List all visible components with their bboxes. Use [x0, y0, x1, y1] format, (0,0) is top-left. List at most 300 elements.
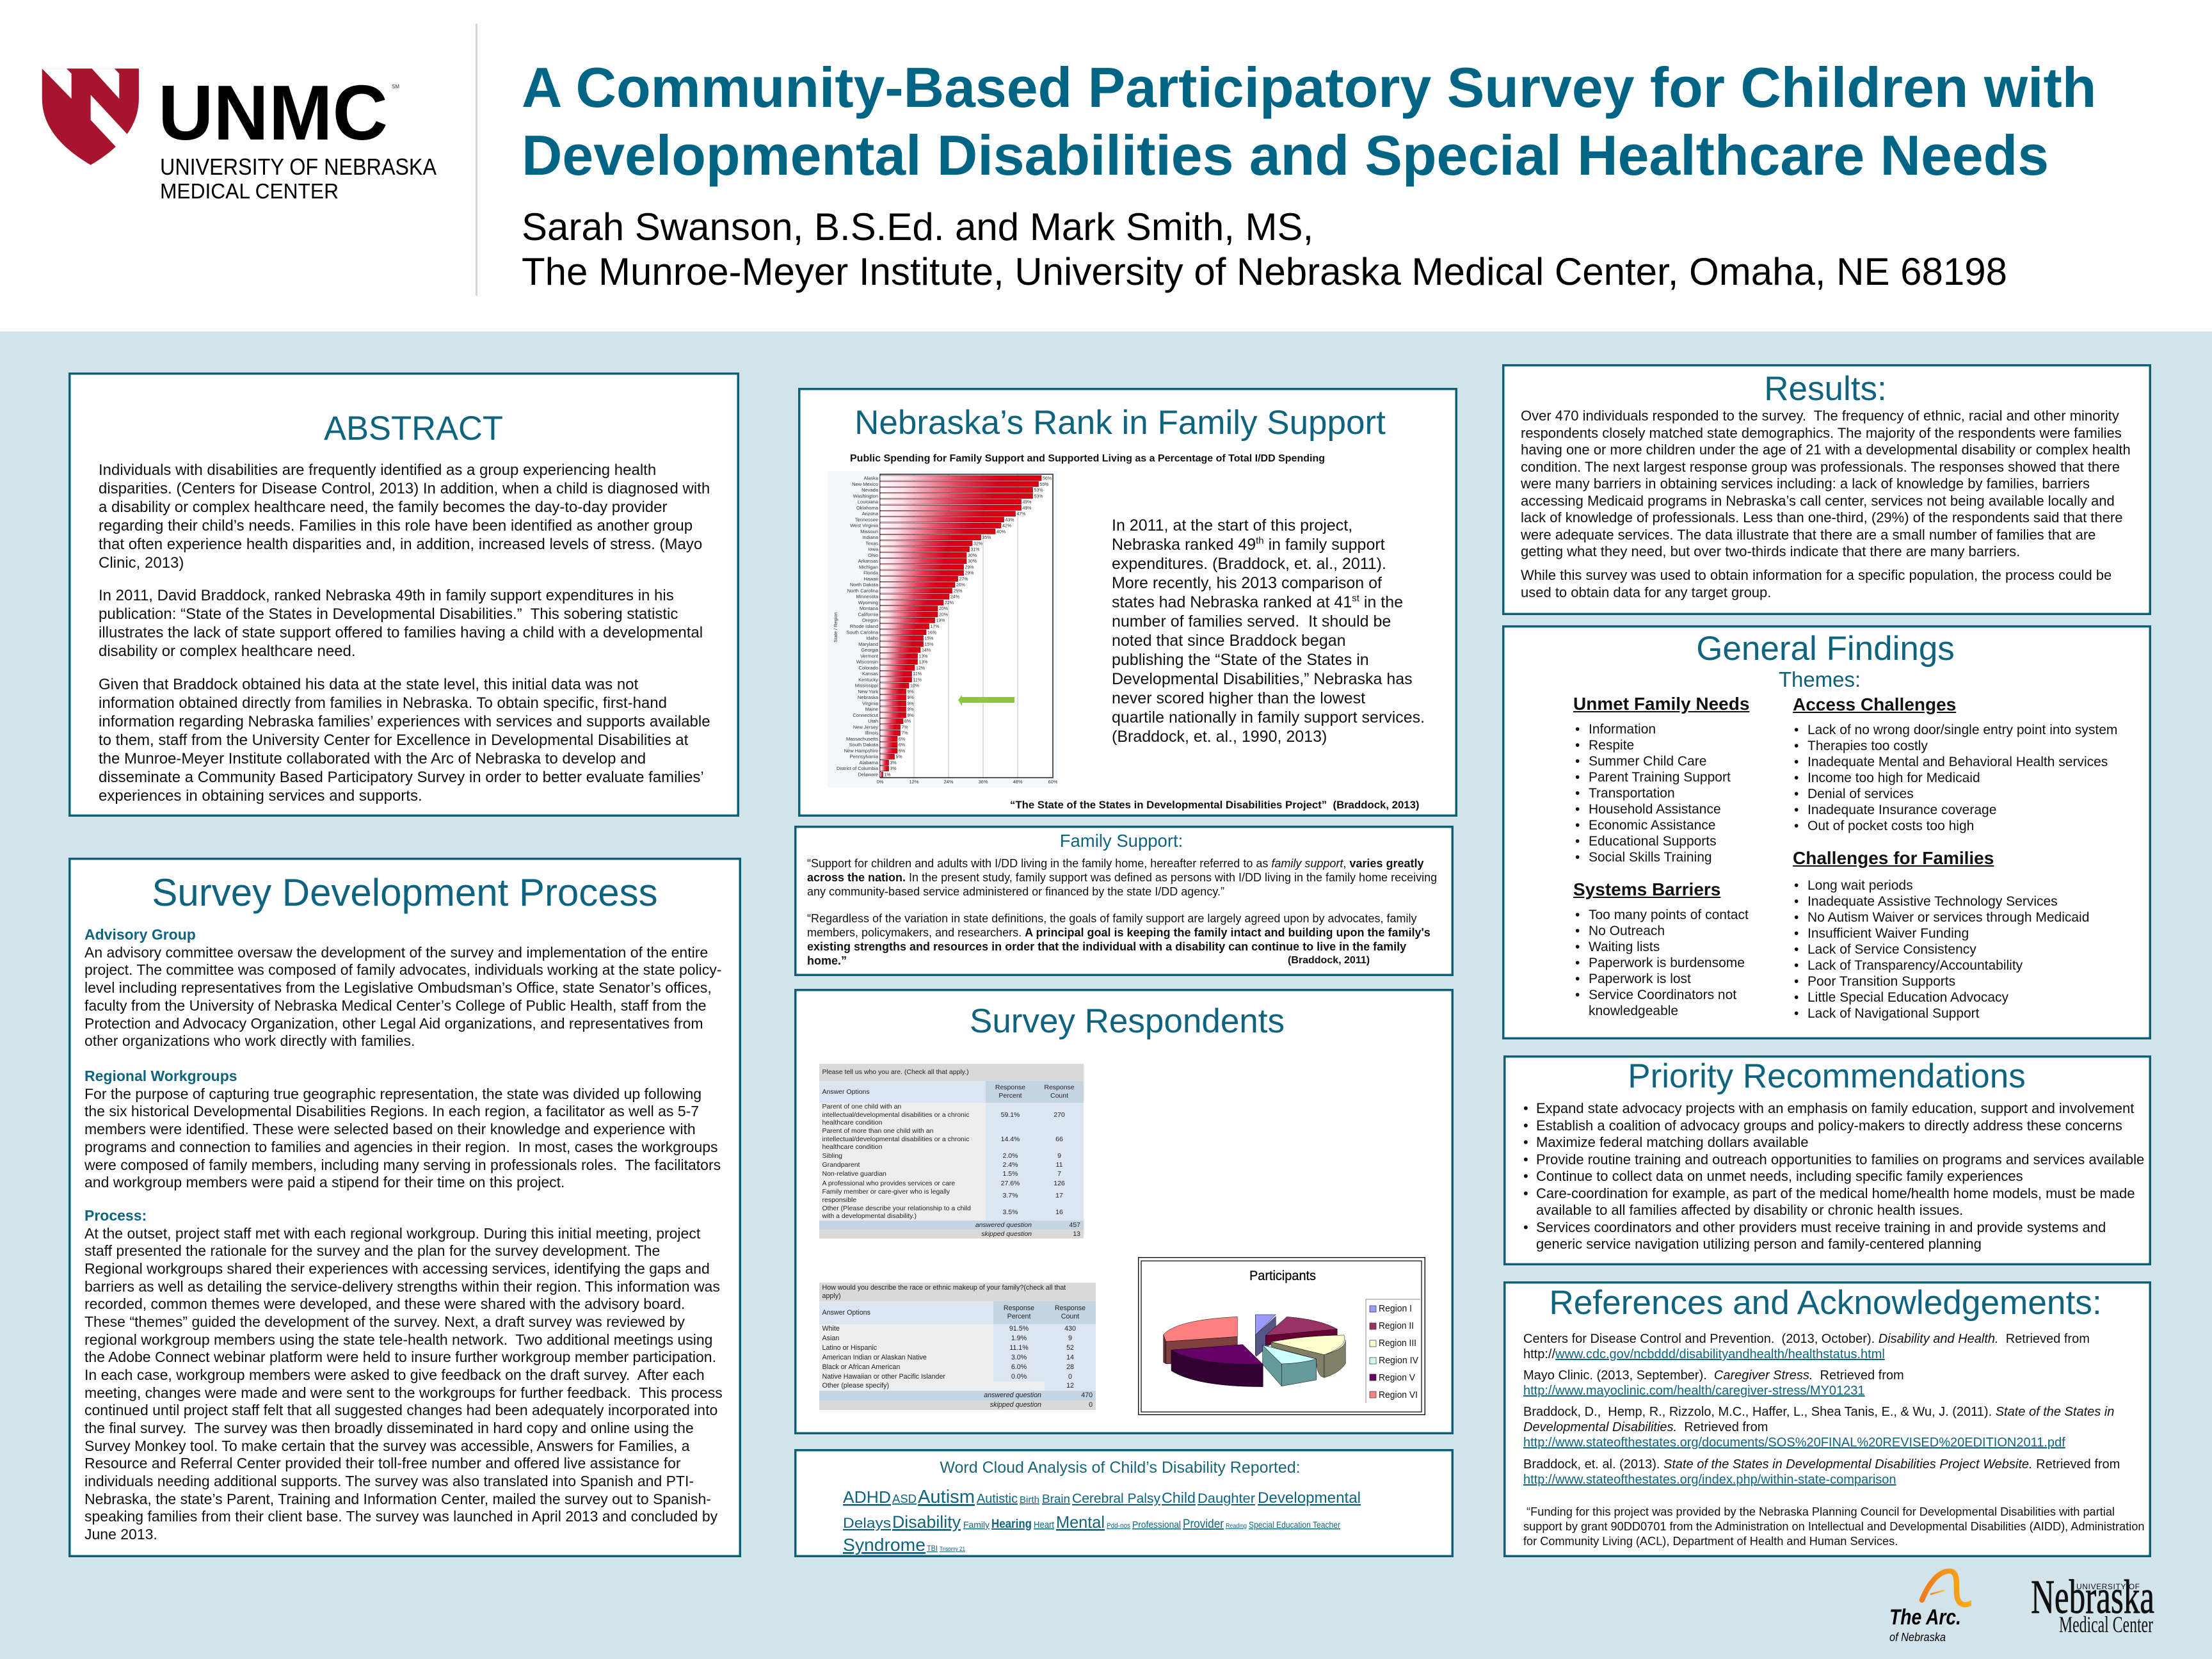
- panel: abstract: In 2011, David Braddock, ranked Nebraska 49th in family support expenditures in his publication: “State of the States in Developmental Disabilities.” This sobering statistic illustrates the lack of state support offered to families having a child with a developmental disability or complex healthcare need.: [99, 586, 703, 659]
- logo: UNMC: UNMC: [158, 69, 388, 156]
- table: race or ethnic makeup: 0.0%: [1011, 1372, 1027, 1380]
- bar chart: spending by state: 13%: [919, 661, 928, 665]
- bar chart: spending by state: [828, 471, 1057, 787]
- bar chart: spending by state: 32%: [974, 541, 982, 546]
- table: who you are: 3.5%: [1003, 1208, 1018, 1216]
- word cloud words: Autism: [918, 1487, 975, 1507]
- bar chart: spending by state: 22%: [945, 601, 954, 605]
- bar chart: spending by state: New Mexico: [852, 481, 878, 487]
- bar chart: spending by state: Hawaii: [863, 576, 878, 582]
- table: who you are: 11: [1056, 1161, 1062, 1169]
- heading: general findings: General Findings: [1696, 630, 1955, 668]
- bar chart: spending by state: 9%: [908, 701, 914, 706]
- word cloud words: Family: [963, 1519, 990, 1530]
- word cloud words: Developmental: [1258, 1489, 1361, 1507]
- word cloud words: Autistic: [977, 1492, 1018, 1506]
- table: who you are: 2.0%: [1003, 1152, 1018, 1160]
- bar chart: spending by state: State / Region: [833, 612, 838, 643]
- bar chart: spending by state: Florida: [863, 570, 879, 576]
- quote one: “Support for children and adults with I/DD living in the family home, hereafter referred to as family support, varies greatly across the nation. In the present study, family support was defined as persons with I/DD living in the family home receiving any community-based service administered or financed by the state I/DD agency.”: [807, 857, 1437, 898]
- bar chart: spending by state: 3%: [890, 767, 897, 771]
- table: race or ethnic makeup: Other (please specify): [822, 1382, 889, 1390]
- word cloud words: Disability: [892, 1512, 961, 1532]
- bar chart: spending by state: 8%: [904, 719, 911, 724]
- heading: nebraska's rank: Nebraska’s Rank in Family Support: [854, 404, 1386, 442]
- bar chart: spending by state: 12%: [909, 779, 919, 785]
- list: recommendations: Continue to collect data on unmet needs, including specific family experiences: [1536, 1168, 2023, 1184]
- reference: Braddock 2013: Braddock, et. al. (2013). State of the States in Developmental Disabilities Project Website. Retrieved from http://www.stateofthestates.org/index.php/within-state-comparison: [1523, 1457, 2120, 1487]
- table: who you are: Response: [995, 1084, 1025, 1091]
- table: who you are: 66: [1055, 1135, 1063, 1143]
- table: race or ethnic makeup: Percent: [1007, 1313, 1030, 1320]
- word cloud words: Reading: [1226, 1523, 1247, 1530]
- bar chart: spending by state: Indiana: [862, 534, 879, 540]
- bar chart: spending by state: Massachusetts: [846, 736, 878, 742]
- list: access challenges: Inadequate Mental and Behavioral Health services: [1807, 755, 2108, 769]
- bar chart: spending by state: 15%: [924, 643, 934, 647]
- table: race or ethnic makeup: 1.9%: [1011, 1334, 1027, 1342]
- bar chart: spending by state: 6%: [899, 749, 905, 754]
- table: who you are: skipped question: [981, 1230, 1032, 1238]
- table: who you are: Family member or care-giver who is legally: [822, 1188, 950, 1196]
- bar chart: spending by state: 17%: [931, 625, 940, 629]
- bar chart: spending by state: 43%: [1005, 518, 1014, 522]
- list: challenges for families: No Autism Waiver or services through Medicaid: [1807, 910, 2089, 925]
- bar chart: spending by state: South Carolina: [846, 629, 879, 635]
- heading: systems barriers: Systems Barriers: [1573, 879, 1720, 899]
- list: access challenges: Out of pocket costs too high: [1807, 819, 1974, 833]
- bar chart: spending by state: Pennsylvania: [849, 754, 879, 760]
- table: who you are: Non-relative guardian: [822, 1170, 886, 1178]
- advisory group text: Advisory Group An advisory committee oversaw the development of the survey and implementation of the entire project. The committee was composed of family advocates, individuals working at the state policy- level including representatives from the Legislative Ombudsman’s Office, state Senator’s offices, faculty from the University of Nebraska Medical Center’s College of Public Health, staff from the Protection and Advocacy Organization, other Legal Aid organizations, and representatives from other organizations who work directly with families.: [84, 926, 721, 1049]
- list: systems barriers: Too many points of contact: [1589, 908, 1749, 922]
- bar chart: spending by state: Arkansas: [858, 558, 878, 564]
- word cloud words: Professional: [1132, 1519, 1181, 1530]
- list: unmet family needs: [1576, 722, 1731, 865]
- word cloud words: Birth: [1020, 1495, 1039, 1505]
- table: race or ethnic makeup: Asian: [822, 1334, 839, 1342]
- abstract text: [99, 461, 710, 804]
- table: who you are: 457: [1069, 1221, 1080, 1229]
- table: who you are: 16: [1055, 1208, 1063, 1216]
- heading: abstract: ABSTRACT: [324, 410, 503, 447]
- list: access challenges: Lack of no wrong door/single entry point into system: [1807, 722, 2117, 737]
- bar chart: spending by state: New York: [858, 689, 878, 694]
- list: challenges for families: [1795, 878, 2089, 1021]
- bar chart: spending by state: Virginia: [862, 700, 879, 706]
- panel: nebraska's rank in family support: [798, 388, 1457, 817]
- table: who you are: with a developmental disability.): [822, 1212, 917, 1220]
- bar chart: spending by state: 25%: [954, 589, 963, 593]
- table: who you are: 126: [1054, 1180, 1065, 1187]
- bar chart: spending by state: 10%: [910, 684, 919, 689]
- list: unmet family needs: Respite: [1589, 738, 1634, 753]
- bar chart: spending by state: 24%: [943, 779, 954, 785]
- bar chart: spending by state: Maryland: [858, 641, 878, 647]
- list: systems barriers: Waiting lists: [1589, 940, 1660, 954]
- list: recommendations: Provide routine training and outreach opportunities to families on programs and services available: [1536, 1151, 2144, 1167]
- list: systems barriers: [1576, 908, 1749, 1018]
- reference: Braddock 2011: Braddock, D., Hemp, R., Rizzolo, M.C., Haffer, L., Shea Tanis, E., & Wu, J. (2011). State of the States in Developmental Disabilities. Retrieved from http://www.stateofthestates.org/documents/SOS%20FINAL%20REVISED%20EDITION2011.pdf: [1523, 1405, 2114, 1450]
- bar chart: spending by state: Wisconsin: [856, 659, 878, 665]
- heading: survey development process: Survey Development Process: [152, 871, 658, 914]
- table: race or ethnic makeup: 12: [1066, 1382, 1074, 1390]
- bar chart: spending by state: 53%: [1034, 494, 1043, 499]
- panel: abstract: [68, 373, 739, 817]
- bar chart: spending by state: Ohio: [868, 552, 878, 558]
- table: who you are: 27.6%: [1001, 1180, 1020, 1187]
- word cloud words: Hearing: [991, 1518, 1032, 1531]
- bar chart: spending by state: 6%: [899, 743, 905, 748]
- bar chart: spending by state: Idaho: [866, 635, 878, 641]
- list: systems barriers: Paperwork is burdensome: [1589, 956, 1745, 970]
- heading: family support: Family Support:: [1060, 831, 1183, 851]
- bar chart: spending by state: 16%: [927, 630, 936, 635]
- abstract text: Individuals with disabilities are frequently identified as a group experiencing health disparities. (Centers for Disease Control, 2013) In addition, when a child is diagnosed with a disability or complex healthcare need, the family becomes the day-to-day provider regarding their child’s needs. Families in this role have been identified as another group that often experience health disparities and, in addition, increased levels of stress. (Mayo Clinic, 2013): [99, 461, 710, 571]
- heading: priority recommendations: Priority Recommendations: [1628, 1057, 2026, 1095]
- bar chart: spending by state: Georgia: [861, 647, 879, 653]
- results paragraph: Over 470 individuals responded to the survey. The frequency of ethnic, racial and other minority respondents closely matched state demographics. The majority of the respondents were families having one or more children under the age of 21 with a developmental disability or complex health condition. The next largest response group was professionals. The responses showed that there were many barriers in obtaining services including: a lack of knowledge by families, barriers accessing Medicaid programs in Nebraska’s call center, services not being available locally and lack of knowledge of professionals. Less than one-third, (29%) of the respondents said that there were adequate services. The data illustrate that there are a small number of families that are getting what they need, but over two-thirds indicate that there are many barriers.: [1521, 408, 2131, 559]
- bar chart: spending by state: 11%: [913, 678, 922, 682]
- panel: word cloud: [794, 1449, 1454, 1557]
- bar chart: spending by state: 1%: [885, 773, 891, 777]
- list: systems barriers: Paperwork is lost: [1589, 972, 1691, 986]
- panel: priority recommendations: [1503, 1055, 2151, 1265]
- word cloud words: Syndrome: [843, 1535, 926, 1555]
- word cloud words: Provider: [1183, 1518, 1224, 1531]
- heading: references: References and Acknowledgements:: [1549, 1284, 2102, 1322]
- bar chart: spending by state: Michigan: [859, 564, 878, 570]
- list: challenges for families: Inadequate Assistive Technology Services: [1807, 894, 2058, 909]
- list: recommendations: Maximize federal matching dollars available: [1536, 1134, 1809, 1150]
- table: race or ethnic makeup: Count: [1061, 1313, 1079, 1320]
- table: who you are: 7: [1057, 1170, 1061, 1178]
- pie chart: participants by region: Region VI: [1379, 1390, 1418, 1400]
- table: race or ethnic makeup: 91.5%: [1009, 1325, 1029, 1333]
- pie chart: participants by region: Participants: [1249, 1269, 1316, 1283]
- bar chart: spending by state: 36%: [978, 779, 988, 785]
- table: race or ethnic makeup: apply): [822, 1292, 841, 1299]
- header band: [0, 0, 2212, 332]
- bar chart: spending by state: 49%: [1023, 506, 1032, 511]
- bar chart: spending by state: 5%: [896, 755, 902, 760]
- table: who you are: 3.7%: [1003, 1192, 1018, 1199]
- list: unmet family needs: Social Skills Training: [1589, 850, 1712, 865]
- table: who you are: Please tell us who you are. (Check all that apply.): [822, 1068, 969, 1076]
- bar chart: spending by state: 48%: [1013, 779, 1023, 785]
- bar chart: spending by state: 9%: [908, 708, 914, 712]
- table: race or ethnic makeup: How would you describe the race or ethnic makeup of your family?(check all that: [822, 1284, 1066, 1292]
- list: access challenges: Denial of services: [1807, 787, 1914, 801]
- bar chart: spending by state: 49%: [1023, 501, 1032, 504]
- table: race or ethnic makeup: 6.0%: [1011, 1363, 1027, 1371]
- quote citation: (Braddock, 2011): [1288, 955, 1370, 966]
- panel: general findings: [1502, 625, 2151, 1039]
- logo: University of Nebraska Medical Center: UNIVERSITY OF: [2076, 1582, 2140, 1591]
- list: challenges for families: Lack of Service Consistency: [1807, 942, 1976, 957]
- list: recommendations: [1523, 1100, 2144, 1252]
- panel: abstract: Given that Braddock obtained his data at the state level, this initial data was not information obtained directly from families in Nebraska. To obtain specific, first-hand information regarding Nebraska families’ experiences with services and supports available to them, staff from the University Center for Excellence in Developmental Disabilities at the Munroe-Meyer Institute collaborated with the Arc of Nebraska to develop and disseminate a Community Based Participatory Survey in order to better evaluate families’ experiences in obtaining services and supports.: [99, 676, 710, 804]
- bar chart: spending by state: 9%: [908, 714, 914, 718]
- word cloud words: Child: [1162, 1489, 1196, 1506]
- table: who you are: Other (Please describe your relationship to a child: [822, 1205, 971, 1212]
- table: race or ethnic makeup: 3.0%: [1011, 1354, 1027, 1361]
- pie chart: participants by region: Region V: [1379, 1372, 1415, 1383]
- bar chart: spending by state: Wyoming: [858, 600, 878, 605]
- bar chart: spending by state: 30%: [968, 559, 977, 564]
- bar chart: spending by state: Missouri: [860, 529, 878, 534]
- chart title: Public Spending for Family Support and Supported Living as a Percentage of Total I/DD Spending: [850, 453, 1325, 464]
- bar chart: spending by state: Tennessee: [855, 517, 878, 522]
- list: challenges for families: Lack of Transparency/Accountability: [1807, 958, 2023, 973]
- word cloud words: Brain: [1042, 1493, 1070, 1505]
- word cloud words: ADHD: [843, 1487, 891, 1507]
- heading: access challenges: Access Challenges: [1793, 694, 1956, 714]
- word cloud words: Mental: [1056, 1512, 1105, 1532]
- table: who you are: 9: [1057, 1152, 1061, 1160]
- word cloud words: Cerebral Palsy: [1072, 1491, 1160, 1506]
- bar chart: spending by state: 7%: [901, 732, 908, 736]
- list: recommendations: Expand state advocacy projects with an emphasis on family education, support and involvement: [1536, 1100, 2134, 1116]
- list: unmet family needs: Educational Supports: [1589, 834, 1717, 849]
- bar chart: spending by state: Colorado: [859, 665, 878, 671]
- list: unmet family needs: Summer Child Care: [1589, 754, 1706, 769]
- bar chart: spending by state: California: [858, 612, 879, 617]
- bar chart: spending by state: 29%: [965, 565, 974, 570]
- panel: family support: [794, 826, 1454, 976]
- pie chart: participants by region: Region IV: [1379, 1355, 1418, 1366]
- logo: UNMC: [42, 68, 437, 203]
- table: who you are: [819, 1064, 1084, 1238]
- bar chart: spending by state: 30%: [968, 554, 977, 558]
- table: who you are: Percent: [998, 1092, 1022, 1100]
- heading: results: Results:: [1764, 370, 1887, 408]
- bar chart: spending by state: 27%: [959, 577, 968, 582]
- pie chart: participants by region: [1138, 1257, 1425, 1415]
- funding acknowledgement: “Funding for this project was provided by the Nebraska Planning Council for Developmental Disabilities with partial support by grant 90DD0701 from the Administration on Intellectual and Developmental Disabilities (AIDD), Administration for Community Living (ACL), Department of Health and Human Services.: [1523, 1505, 2144, 1548]
- table: race or ethnic makeup: Answer Options: [822, 1308, 870, 1316]
- table: race or ethnic makeup: [819, 1283, 1096, 1410]
- list: access challenges: Therapies too costly: [1807, 739, 1928, 753]
- reference: Mayo Clinic: Mayo Clinic. (2013, September). Caregiver Stress. Retrieved from http://www.mayoclinic.com/health/caregiver-stress/MY01231: [1523, 1368, 1904, 1398]
- word cloud words: TBI: [927, 1544, 938, 1553]
- bar chart: spending by state: Washington: [853, 493, 878, 499]
- bar chart: spending by state: Louisiana: [858, 499, 879, 504]
- table: who you are: 14.4%: [1001, 1135, 1020, 1143]
- list: challenges for families: Long wait periods: [1807, 878, 1913, 892]
- bar chart: spending by state: 35%: [982, 536, 991, 540]
- list: unmet family needs: Parent Training Support: [1589, 770, 1731, 785]
- table: race or ethnic makeup: Native Hawaiian or other Pacific Islander: [822, 1372, 945, 1380]
- table: race or ethnic makeup: 14: [1066, 1354, 1074, 1361]
- bar chart: spending by state: 53%: [1034, 488, 1043, 493]
- bar chart: spending by state: Kansas: [862, 671, 878, 677]
- table: race or ethnic makeup: 9: [1068, 1334, 1072, 1342]
- table: race or ethnic makeup: 0: [1068, 1372, 1072, 1380]
- word cloud words: Pdd-nos: [1107, 1522, 1130, 1530]
- bar chart: spending by state: 13%: [919, 654, 928, 659]
- regional workgroups text: Regional Workgroups For the purpose of capturing true geographic representation, the state was divided up following the six historical Developmental Disabilities Regions. In each region, a facilitator as well as 5-7 members were identified. These were selected based on their knowledge and experience with programs and connection to families and agencies in their region. In most, cases the workgroups were composed of family members, including many serving in professionals roles. The facilitators and workgroup members were paid a stipend for their time on this project.: [84, 1068, 721, 1190]
- table: race or ethnic makeup: 470: [1081, 1391, 1093, 1399]
- bar chart: spending by state: Alabama: [859, 760, 879, 765]
- bar chart: spending by state: Rhode Island: [850, 623, 878, 629]
- bar chart: spending by state: 31%: [970, 548, 980, 552]
- chart citation: “The State of the States in Developmental Disabilities Project” (Braddock, 2013): [1010, 799, 1419, 811]
- quote two: “Regardless of the variation in state definitions, the goals of family support are largely agreed upon by advocates, family members, policymakers, and researchers. A principal goal is keeping the family intact and building upon the family's existing strengths and resources in order that the individual with a disability can continue to live in the family home.”: [807, 912, 1431, 967]
- table: who you are: Parent of more than one child with an: [822, 1127, 933, 1135]
- table: race or ethnic makeup: Black or African American: [822, 1363, 900, 1371]
- bar chart: spending by state: Texas: [865, 540, 878, 546]
- bar chart: spending by state: Illinois: [865, 730, 878, 736]
- authors: Sarah Swanson, B.S.Ed. and Mark Smith, MS, The Munroe-Meyer Institute, University of Nebraska Medical Center, Omaha, NE 68198: [522, 205, 2007, 293]
- table: who you are: Response: [1044, 1084, 1075, 1091]
- table: who you are: 59.1%: [1001, 1111, 1020, 1119]
- logo: UNMC: SM: [392, 84, 399, 90]
- table: race or ethnic makeup: 0: [1089, 1401, 1093, 1409]
- table: who you are: Count: [1050, 1092, 1068, 1100]
- table: who you are: Grandparent: [822, 1161, 860, 1169]
- heading: survey respondents: Survey Respondents: [970, 1002, 1285, 1040]
- bar chart: spending by state: 15%: [924, 636, 934, 641]
- bar chart: spending by state: Arizona: [862, 511, 879, 517]
- table: race or ethnic makeup: White: [822, 1325, 840, 1333]
- bar chart: spending by state: New Jersey: [853, 724, 878, 730]
- list: challenges for families: Lack of Navigational Support: [1807, 1006, 1979, 1021]
- table: race or ethnic makeup: Response: [1004, 1304, 1034, 1312]
- bar chart: spending by state: 3%: [890, 761, 897, 765]
- bar chart: spending by state: 0%: [877, 779, 884, 785]
- word cloud words: Heart: [1034, 1519, 1055, 1530]
- word cloud words: Delays: [843, 1515, 891, 1531]
- bar chart: spending by state: New Hampshire: [844, 748, 878, 754]
- bar chart: spending by state: 42%: [1002, 524, 1011, 529]
- bar chart: spending by state: Nebraska: [858, 694, 879, 700]
- list: access challenges: Inadequate Insurance coverage: [1807, 803, 1996, 817]
- results closing paragraph: While this survey was used to obtain information for a specific population, the process could be used to obtain data for any target group.: [1521, 567, 2112, 600]
- heading: challenges for families: Challenges for Families: [1793, 847, 1994, 868]
- bar chart: spending by state: Delaware: [858, 772, 878, 777]
- bar chart: spending by state: Nevada: [862, 487, 879, 493]
- bar chart: spending by state: 14%: [922, 648, 931, 653]
- list: unmet family needs: Household Assistance: [1589, 802, 1721, 817]
- panel: results: [1502, 364, 2151, 615]
- table: race or ethnic makeup: Latino or Hispanic: [822, 1344, 877, 1352]
- bar chart: spending by state: 40%: [997, 530, 1006, 534]
- word cloud words: [843, 1487, 1361, 1555]
- table: who you are: intellectual/developmental disabilities or a chronic: [822, 1135, 969, 1143]
- bar chart: spending by state: Utah: [868, 718, 878, 724]
- table: who you are: 13: [1073, 1230, 1080, 1238]
- bar chart: spending by state: 55%: [1039, 483, 1049, 487]
- list: recommendations: Establish a coalition of advocacy groups and policy-makers to directly address these concerns: [1536, 1118, 2122, 1133]
- bar chart: spending by state: 6%: [899, 737, 905, 742]
- list: access challenges: Income too high for Medicaid: [1807, 771, 1980, 785]
- table: who you are: healthcare condition: [822, 1143, 882, 1151]
- bar chart: spending by state: Maine: [865, 707, 878, 712]
- word cloud words: Special Education Teacher: [1249, 1519, 1340, 1530]
- bar chart: spending by state: District of Columbia: [837, 765, 879, 771]
- rank narrative text: In 2011, at the start of this project, Nebraska ranked 49th in family support expenditures. (Braddock, et. al., 2011). More recently, his 2013 comparison of states had Nebraska ranked at 41st in the number of families served. It should be noted that since Braddock began publishing the “State of the States in Developmental Disabilities,” Nebraska has never scored higher than the lowest quartile nationally in family support services. (Braddock, et. al., 1990, 2013): [1112, 517, 1425, 746]
- list: challenges for families: Poor Transition Supports: [1807, 974, 1955, 989]
- reference: CDC: Centers for Disease Control and Prevention. (2013, October). Disability and Health. Retrieved from http://www.cdc.gov/ncbddd/disabilityandhealth/healthstatus.html: [1523, 1332, 2090, 1361]
- pie chart: participants by region: Region III: [1379, 1338, 1416, 1349]
- table: race or ethnic makeup: 430: [1064, 1325, 1076, 1333]
- pie chart: participants by region: Region II: [1379, 1320, 1414, 1331]
- table: who you are: answered question: [975, 1221, 1032, 1229]
- list: systems barriers: No Outreach: [1589, 924, 1665, 938]
- bar chart: spending by state: 19%: [936, 619, 945, 623]
- table: who you are: 270: [1054, 1111, 1065, 1119]
- list: recommendations: Care-coordination for example, as part of the medical home/health home models, must be made available to all families affected by disability or chronic health issues.: [1536, 1185, 2135, 1218]
- list: access challenges: [1795, 722, 2117, 833]
- list: challenges for families: Insufficient Waiver Funding: [1807, 926, 1969, 941]
- logo: The Arc of Nebraska: [1889, 1568, 1971, 1644]
- logo: UNMC: MEDICAL CENTER: [160, 179, 339, 203]
- word cloud words: ASD: [892, 1493, 917, 1505]
- list: unmet family needs: Information: [1589, 722, 1656, 736]
- heading: word cloud: Word Cloud Analysis of Child’s Disability Reported:: [940, 1459, 1301, 1477]
- bar chart: spending by state: 47%: [1016, 512, 1026, 517]
- bar chart: spending by state: West Virginia: [850, 523, 879, 529]
- panel: references and acknowledgements: [1503, 1281, 2151, 1557]
- bar chart: spending by state: North Carolina: [847, 588, 879, 593]
- table: who you are: A professional who provides services or care: [822, 1180, 955, 1187]
- subheading: themes: Themes:: [1779, 668, 1861, 691]
- bar chart: spending by state: 9%: [908, 696, 914, 700]
- bar chart: spending by state: 7%: [901, 725, 908, 730]
- bar chart: spending by state: Oklahoma: [856, 505, 879, 511]
- list: challenges for families: Little Special Education Advocacy: [1807, 990, 2008, 1005]
- bar chart: spending by state: North Dakota: [850, 582, 879, 588]
- table: race or ethnic makeup: American Indian or Alaskan Native: [822, 1354, 927, 1361]
- word cloud words: Daughter: [1198, 1491, 1255, 1506]
- bar chart: spending by state: 29%: [965, 572, 974, 576]
- bar chart: spending by state: Oregon: [862, 618, 878, 623]
- table: race or ethnic makeup: 52: [1066, 1344, 1074, 1352]
- table: who you are: intellectual/developmental disabilities or a chronic: [822, 1111, 969, 1119]
- table: race or ethnic makeup: 11.1%: [1009, 1344, 1029, 1352]
- bar chart: spending by state: Connecticut: [853, 712, 879, 718]
- bar chart: spending by state: Kentucky: [858, 677, 878, 682]
- list: unmet family needs: Transportation: [1589, 786, 1675, 801]
- table: who you are: Answer Options: [822, 1088, 870, 1096]
- table: who you are: 1.5%: [1003, 1170, 1018, 1178]
- bar chart: spending by state: Vermont: [860, 653, 879, 659]
- table: who you are: Parent of one child with an: [822, 1103, 901, 1110]
- bar chart: spending by state: Iowa: [868, 547, 879, 552]
- table: race or ethnic makeup: 28: [1066, 1363, 1074, 1371]
- word cloud words: Trisomy 21: [940, 1546, 965, 1552]
- table: who you are: Sibling: [822, 1152, 842, 1160]
- table: who you are: responsible: [822, 1196, 856, 1204]
- bar chart: spending by state: 11%: [913, 672, 922, 677]
- pie chart: participants by region: Region I: [1379, 1303, 1412, 1314]
- title: A Community-Based Participatory Survey for Children with Developmental Disabilities and Special Healthcare Needs: [522, 56, 2096, 187]
- process text: Process: At the outset, project staff met with each regional workgroup. During this initial meeting, project staff presented the rationale for the survey and the plan for the survey development. The Regional workgroups shared their experiences with accessing services, identifying the gaps and barriers as well as detailing the service-delivery strengths within their region. This information was recorded, common themes were developed, and these were shared with the advisory board. These “themes” guided the development of the survey. Next, a draft survey was reviewed by regional workgroup members using the state tele-health network. Two additional meetings using the Adobe Connect webinar platform were held to insure further workgroup member participation. In each case, workgroup members were asked to give feedback on the draft survey. After each meeting, changes were made and were sent to the workgroups for further feedback. This process continued until project staff felt that all suggested changes had been adequately incorporated into the final survey. The survey was then broadly disseminated in hard copy and online using the Survey Monkey tool. To make certain that the survey was accessible, Answers for Families, a Resource and Referral Center provided their toll-free number and offered live assistance for individuals needing additional supports. The survey was also translated into Spanish and PTI- Nebraska, the state’s Parent, Training and Information Center, mailed the survey out to Spanish- speaking families from their client base. The survey was launched in April 2013 and concluded by June 2013.: [84, 1207, 723, 1543]
- list: unmet family needs: Economic Assistance: [1589, 818, 1715, 833]
- table: who you are: healthcare condition: [822, 1119, 882, 1126]
- bar chart: spending by state: Mississippi: [855, 683, 878, 689]
- bar chart: spending by state: Minnesota: [856, 594, 879, 600]
- bar chart: spending by state: 24%: [950, 595, 959, 600]
- bar chart: spending by state: Montana: [860, 605, 879, 611]
- table: race or ethnic makeup: answered question: [984, 1391, 1041, 1399]
- arrow: Nebraska marker: [958, 695, 1014, 706]
- heading: unmet family needs: Unmet Family Needs: [1573, 694, 1749, 714]
- table: race or ethnic makeup: Response: [1055, 1304, 1086, 1312]
- bar chart: spending by state: 56%: [1043, 476, 1052, 481]
- bar chart: spending by state: 20%: [939, 607, 948, 611]
